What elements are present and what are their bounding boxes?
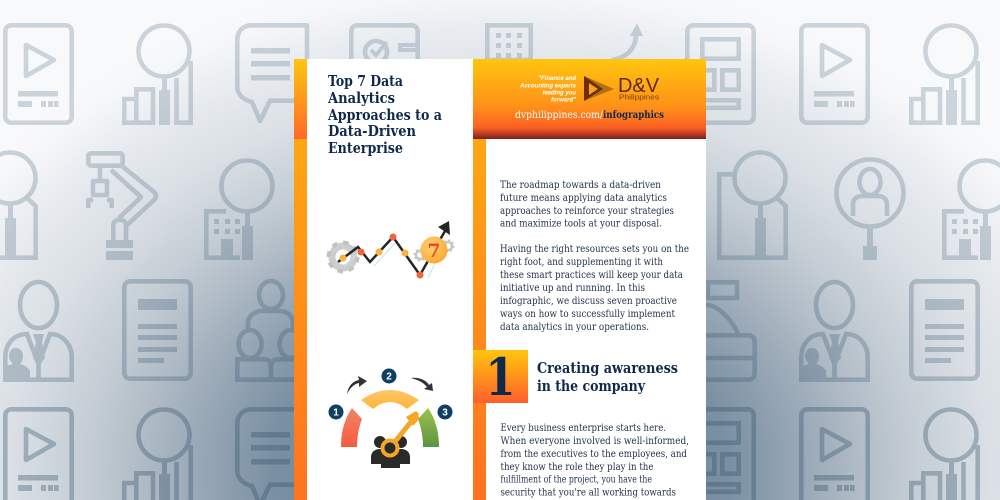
- inner accent strip: [473, 139, 486, 500]
- curved arrows: [347, 376, 433, 394]
- tagline: "Finance and: [538, 76, 576, 82]
- title: Top 7 Data: [328, 73, 404, 90]
- light blue trend shadow: [344, 240, 446, 278]
- logo: D&V Philippines: Philippines: [619, 92, 659, 102]
- title: [327, 73, 443, 157]
- tagline: forward": [551, 98, 576, 104]
- logo: D&V Philippines: [584, 75, 660, 102]
- section 1 body text: they know the role they play in the: [500, 462, 654, 473]
- title: Approaches to a: [327, 107, 443, 124]
- background icon pattern: row 3: [3, 281, 978, 382]
- website url: infographics: [603, 109, 664, 121]
- icon: gauge with key and team: [328, 368, 452, 468]
- background icon pattern: row 1: [5, 23, 978, 125]
- section 1 body text: fulfillment of the project, you have the: [500, 474, 652, 486]
- intro paragraph 2: infographic, we discuss seven proactive: [500, 296, 677, 307]
- intro paragraph 2: initiative up and running. In this: [500, 283, 645, 294]
- intro paragraph 1: future means applying data analytics: [500, 193, 667, 204]
- icon: rising line chart with gears and 7 badge: [328, 221, 454, 278]
- website url: dvphilippines.com/: [515, 109, 603, 121]
- section 1 body text: [500, 423, 689, 498]
- number badges: [328, 368, 452, 420]
- arrow head: [438, 221, 450, 235]
- gauge red segment: [341, 408, 362, 447]
- intro paragraph 2: Having the right resources sets you on the: [500, 244, 689, 255]
- gauge green segment: [418, 408, 439, 447]
- data points: [340, 234, 424, 278]
- tagline: Accounting experts: [519, 84, 577, 90]
- small gears: [414, 240, 454, 260]
- section 1 heading: [537, 360, 678, 395]
- intro paragraph 2: these smart practices will keep your data: [500, 270, 683, 281]
- panel: infographic page: [294, 59, 706, 500]
- key: [382, 411, 420, 456]
- intro paragraph 2: [500, 244, 689, 333]
- intro paragraph 1: and maximize tools at your disposal.: [500, 218, 662, 230]
- section 1 body text: from the executives to the employees, and: [500, 449, 687, 460]
- section 1 heading: in the company: [537, 378, 645, 395]
- section 1 heading: Creating awareness: [537, 360, 678, 377]
- number badges: 3: [442, 408, 448, 418]
- badge: 7: 7: [427, 240, 441, 262]
- intro paragraph 2: data analytics in your operations.: [500, 322, 649, 333]
- section 1 body text: Every business enterprise starts here.: [500, 423, 666, 434]
- header band: [473, 59, 706, 139]
- trend line: [338, 231, 445, 275]
- number badges: 1: [333, 408, 339, 418]
- title: Enterprise: [328, 140, 403, 157]
- logo: D&V Philippines: D&V: [618, 75, 660, 97]
- website url: [515, 109, 664, 121]
- section 1 number block: 1: [486, 348, 516, 408]
- tagline: [519, 76, 577, 104]
- intro paragraph 1: The roadmap towards a data-driven: [500, 180, 662, 191]
- section 1 body text: security that you're all working towards: [500, 488, 676, 498]
- title: Analytics: [327, 90, 395, 107]
- background icon pattern: row 2: [0, 152, 1000, 260]
- background icon pattern: row 4: [5, 409, 978, 500]
- tagline: leading you: [543, 90, 576, 96]
- section 1 number block: [473, 348, 528, 408]
- team silhouettes: [371, 436, 410, 468]
- large gear: [328, 242, 358, 272]
- intro paragraph 1: approaches to reinforce your strategies: [500, 206, 674, 217]
- number badges: 2: [386, 372, 392, 382]
- section 1 body text: When everyone involved is well-informed,: [500, 436, 689, 447]
- gauge yellow segment: [361, 390, 419, 409]
- left accent strip: [294, 59, 307, 500]
- intro paragraph 2: right foot, and supplementing it with: [500, 257, 664, 268]
- intro paragraph 1: [500, 180, 674, 230]
- title: Data-Driven: [328, 123, 416, 140]
- intro paragraph 2: ways on how to successfully implement: [500, 309, 675, 320]
